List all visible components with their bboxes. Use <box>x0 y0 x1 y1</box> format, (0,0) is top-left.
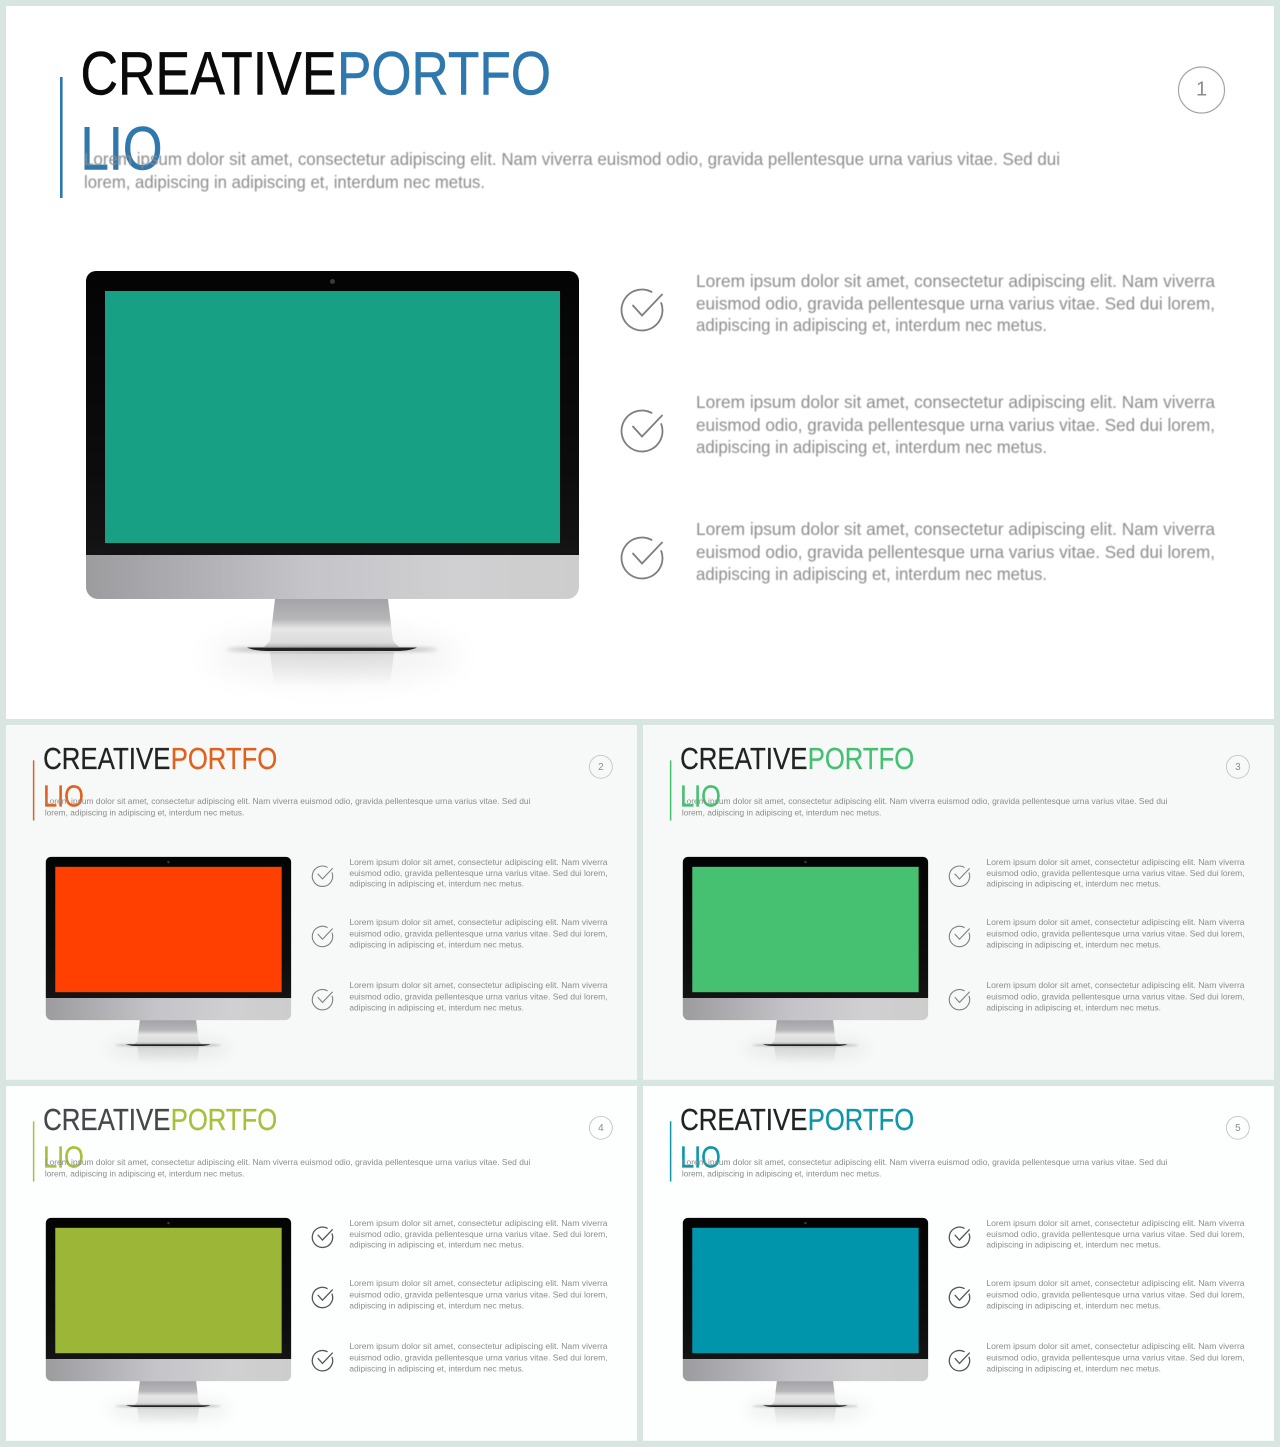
check item 3 <box>949 1341 1245 1374</box>
title <box>680 1104 914 1174</box>
check item 1: Lorem ipsum dolor sit amet, consectetur adipiscing elit. Nam viverra <box>349 1218 608 1228</box>
intro text <box>45 796 531 818</box>
intro text: Lorem ipsum dolor sit amet, consectetur adipiscing elit. Nam viverra euismod odio, gravida pellentesque urna varius vitae. Sed dui <box>682 1157 1168 1167</box>
check item 1 <box>949 857 1245 889</box>
title: CREATIVE <box>43 1104 170 1137</box>
check item 3: adipiscing in adipiscing et, interdum nec metus. <box>349 1003 524 1013</box>
title: LIO <box>43 780 84 813</box>
check item 2: euismod odio, gravida pellentesque urna varius vitae. Sed dui lorem, <box>349 928 608 938</box>
check item 1: euismod odio, gravida pellentesque urna varius vitae. Sed dui lorem, <box>696 294 1215 314</box>
page number badge: 4 <box>598 1123 604 1134</box>
check item 3: Lorem ipsum dolor sit amet, consectetur adipiscing elit. Nam viverra <box>986 1341 1245 1351</box>
check item 3: euismod odio, gravida pellentesque urna varius vitae. Sed dui lorem, <box>696 542 1215 562</box>
check item 2 <box>949 1278 1245 1310</box>
check item 3: Lorem ipsum dolor sit amet, consectetur adipiscing elit. Nam viverra <box>349 1341 608 1351</box>
panel: slide 1 <box>6 6 1274 719</box>
page number badge: 1 <box>1196 78 1207 100</box>
title: CREATIVE <box>680 1104 807 1137</box>
check item 3: euismod odio, gravida pellentesque urna varius vitae. Sed dui lorem, <box>349 992 608 1002</box>
accent bar <box>670 760 671 821</box>
title: PORTFO <box>337 40 551 108</box>
intro text <box>682 796 1168 818</box>
intro text: Lorem ipsum dolor sit amet, consectetur adipiscing elit. Nam viverra euismod odio, gravida pellentesque urna varius vitae. Sed dui <box>45 796 531 806</box>
title: PORTFO <box>171 743 277 776</box>
intro text: lorem, adipiscing in adipiscing et, interdum nec metus. <box>84 172 485 192</box>
title: CREATIVE <box>80 40 336 108</box>
check item 2: adipiscing in adipiscing et, interdum nec metus. <box>349 939 524 949</box>
check item 1 <box>949 1218 1245 1250</box>
accent bar <box>670 1121 671 1182</box>
page number badge <box>1178 67 1224 113</box>
title: LIO <box>680 1141 721 1174</box>
accent bar <box>60 77 63 198</box>
monitor mockup <box>46 1218 291 1424</box>
check item 2 <box>312 1278 608 1310</box>
check item 2: adipiscing in adipiscing et, interdum nec metus. <box>696 437 1047 457</box>
check item 1: adipiscing in adipiscing et, interdum nec metus. <box>986 879 1161 889</box>
page number badge <box>1226 1116 1249 1139</box>
check item 3: euismod odio, gravida pellentesque urna varius vitae. Sed dui lorem, <box>986 992 1245 1002</box>
check item 2: Lorem ipsum dolor sit amet, consectetur adipiscing elit. Nam viverra <box>986 1278 1245 1288</box>
accent bar <box>33 760 34 821</box>
title: CREATIVE <box>43 743 170 776</box>
intro text: Lorem ipsum dolor sit amet, consectetur adipiscing elit. Nam viverra euismod odio, gravida pellentesque urna varius vitae. Sed dui <box>45 1157 531 1167</box>
check item 3: euismod odio, gravida pellentesque urna varius vitae. Sed dui lorem, <box>986 1353 1245 1363</box>
title <box>680 743 914 813</box>
title: PORTFO <box>171 1104 277 1137</box>
intro text: Lorem ipsum dolor sit amet, consectetur adipiscing elit. Nam viverra euismod odio, gravida pellentesque urna varius vitae. Sed dui <box>682 796 1168 806</box>
check item 1: Lorem ipsum dolor sit amet, consectetur adipiscing elit. Nam viverra <box>986 1218 1245 1228</box>
check item 3: Lorem ipsum dolor sit amet, consectetur adipiscing elit. Nam viverra <box>696 519 1215 539</box>
check item 3: Lorem ipsum dolor sit amet, consectetur adipiscing elit. Nam viverra <box>349 980 608 990</box>
title: LIO <box>43 1141 84 1174</box>
check item 3: Lorem ipsum dolor sit amet, consectetur adipiscing elit. Nam viverra <box>986 980 1245 990</box>
check item 1 <box>312 1218 608 1250</box>
check item 3 <box>949 980 1245 1013</box>
check item 1: euismod odio, gravida pellentesque urna varius vitae. Sed dui lorem, <box>349 1229 608 1239</box>
check item 1: Lorem ipsum dolor sit amet, consectetur adipiscing elit. Nam viverra <box>349 857 608 867</box>
check item 3 <box>312 1341 608 1374</box>
page number badge <box>589 755 612 778</box>
intro text <box>45 1157 531 1179</box>
title: LIO <box>680 780 721 813</box>
intro text: lorem, adipiscing in adipiscing et, interdum nec metus. <box>682 1169 881 1179</box>
check item 2: Lorem ipsum dolor sit amet, consectetur adipiscing elit. Nam viverra <box>986 917 1245 927</box>
title: PORTFO <box>808 743 914 776</box>
intro text: lorem, adipiscing in adipiscing et, interdum nec metus. <box>45 1169 244 1179</box>
check item 2: Lorem ipsum dolor sit amet, consectetur adipiscing elit. Nam viverra <box>696 392 1215 412</box>
check item 1: adipiscing in adipiscing et, interdum nec metus. <box>349 879 524 889</box>
check item 2: euismod odio, gravida pellentesque urna varius vitae. Sed dui lorem, <box>986 1289 1245 1299</box>
check item 3: adipiscing in adipiscing et, interdum nec metus. <box>986 1364 1161 1374</box>
panel: slide 3 <box>643 725 1274 1080</box>
monitor mockup <box>86 271 579 686</box>
check item 2: adipiscing in adipiscing et, interdum nec metus. <box>986 939 1161 949</box>
check item 1: adipiscing in adipiscing et, interdum nec metus. <box>349 1240 524 1250</box>
title <box>43 1104 277 1174</box>
panel: slide 2 <box>6 725 637 1080</box>
intro text: Lorem ipsum dolor sit amet, consectetur adipiscing elit. Nam viverra euismod odio, gravida pellentesque urna varius vitae. Sed dui <box>84 149 1060 169</box>
check item 1: euismod odio, gravida pellentesque urna varius vitae. Sed dui lorem, <box>349 868 608 878</box>
title <box>43 743 277 813</box>
check item 3: adipiscing in adipiscing et, interdum nec metus. <box>349 1364 524 1374</box>
check item 3 <box>622 519 1215 584</box>
check item 3: adipiscing in adipiscing et, interdum nec metus. <box>986 1003 1161 1013</box>
panel: slide 4 <box>6 1086 637 1441</box>
check item 3: euismod odio, gravida pellentesque urna varius vitae. Sed dui lorem, <box>349 1353 608 1363</box>
check item 1: Lorem ipsum dolor sit amet, consectetur adipiscing elit. Nam viverra <box>986 857 1245 867</box>
intro text: lorem, adipiscing in adipiscing et, interdum nec metus. <box>45 808 244 818</box>
check item 2: adipiscing in adipiscing et, interdum nec metus. <box>986 1300 1161 1310</box>
title: LIO <box>80 114 162 182</box>
check item 2: euismod odio, gravida pellentesque urna varius vitae. Sed dui lorem, <box>349 1289 608 1299</box>
check item 2: Lorem ipsum dolor sit amet, consectetur adipiscing elit. Nam viverra <box>349 1278 608 1288</box>
check item 2: Lorem ipsum dolor sit amet, consectetur adipiscing elit. Nam viverra <box>349 917 608 927</box>
check item 2 <box>312 917 608 949</box>
check item 2 <box>949 917 1245 949</box>
panel: slide 5 <box>643 1086 1274 1441</box>
check item 2 <box>622 392 1215 457</box>
page number badge <box>1226 755 1249 778</box>
page number badge: 2 <box>598 762 604 773</box>
intro text <box>682 1157 1168 1179</box>
monitor mockup <box>46 857 291 1063</box>
monitor mockup <box>683 1218 928 1424</box>
page number badge: 5 <box>1235 1123 1241 1134</box>
check item 1: adipiscing in adipiscing et, interdum nec metus. <box>696 315 1047 335</box>
check item 1 <box>312 857 608 889</box>
check item 1: euismod odio, gravida pellentesque urna varius vitae. Sed dui lorem, <box>986 868 1245 878</box>
check item 1 <box>622 271 1215 335</box>
title: CREATIVE <box>680 743 807 776</box>
check item 3 <box>312 980 608 1013</box>
check item 1: euismod odio, gravida pellentesque urna varius vitae. Sed dui lorem, <box>986 1229 1245 1239</box>
page number badge <box>589 1116 612 1139</box>
title <box>80 40 551 182</box>
intro text: lorem, adipiscing in adipiscing et, interdum nec metus. <box>682 808 881 818</box>
check item 1: Lorem ipsum dolor sit amet, consectetur adipiscing elit. Nam viverra <box>696 271 1215 291</box>
title: PORTFO <box>808 1104 914 1137</box>
page number badge: 3 <box>1235 762 1241 773</box>
check item 2: euismod odio, gravida pellentesque urna varius vitae. Sed dui lorem, <box>986 928 1245 938</box>
check item 1: adipiscing in adipiscing et, interdum nec metus. <box>986 1240 1161 1250</box>
check item 2: adipiscing in adipiscing et, interdum nec metus. <box>349 1300 524 1310</box>
check item 2: euismod odio, gravida pellentesque urna varius vitae. Sed dui lorem, <box>696 415 1215 435</box>
monitor mockup <box>683 857 928 1063</box>
accent bar <box>33 1121 34 1182</box>
check item 3: adipiscing in adipiscing et, interdum nec metus. <box>696 564 1047 584</box>
intro text <box>84 149 1060 192</box>
